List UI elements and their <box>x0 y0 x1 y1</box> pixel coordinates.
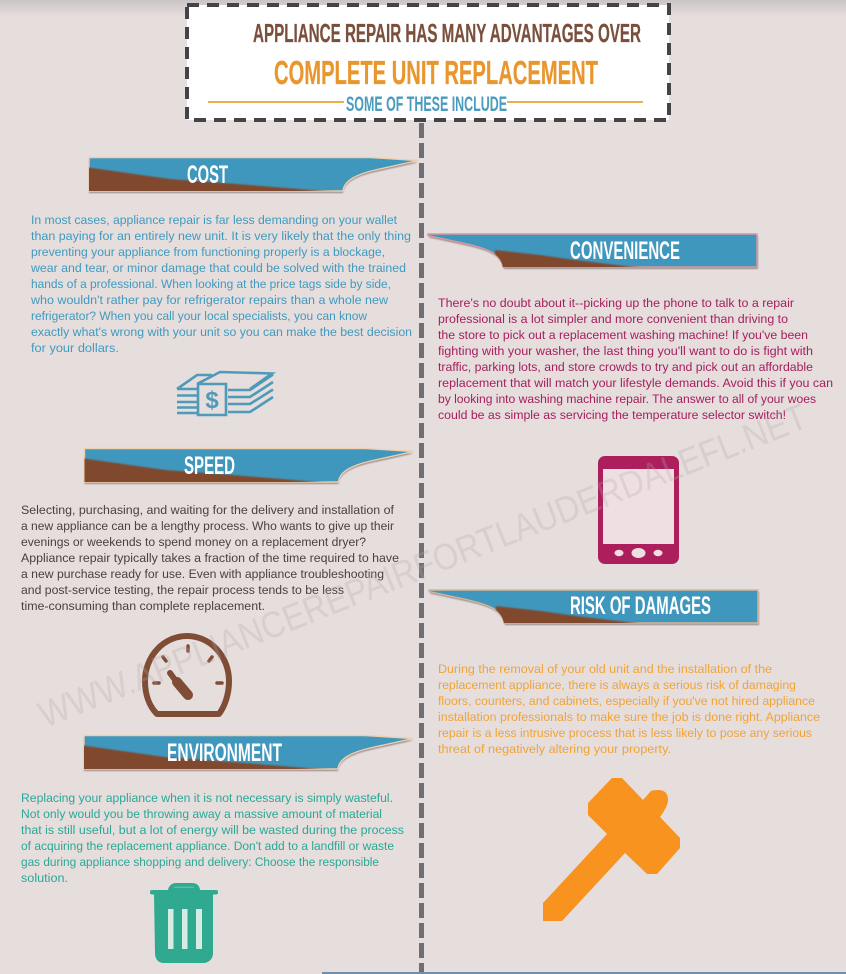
bottom edge line <box>322 972 846 974</box>
header box <box>187 5 669 120</box>
ribbon: risk of damages: RISK OF DAMAGES <box>570 592 711 620</box>
environment text <box>21 791 404 885</box>
ribbon: environment <box>80 736 413 774</box>
risk text: floors, counters, and cabinets, especially if you've not hired appliance <box>438 694 815 708</box>
cost text: than paying for an entirely new unit. It is very likely that the only thing <box>31 229 411 243</box>
cost text: In most cases, appliance repair is far less demanding on your wallet <box>31 213 398 227</box>
ribbon: convenience <box>428 234 758 269</box>
speed text <box>21 503 399 613</box>
panel: convenience <box>428 234 833 564</box>
cost text: who wouldn't rather pay for refrigerator repairs than a whole new <box>30 293 388 307</box>
environment text: that is still useful, but a lot of energy will be wasted during the process <box>21 823 404 837</box>
subtitle with rules: SOME OF THESE INCLUDE <box>346 93 507 116</box>
icon: gauge <box>145 636 229 714</box>
convenience text: fighting with your washer, the last thing you'll want to do is fight with <box>438 344 813 358</box>
ribbon: environment: ENVIRONMENT <box>167 739 282 767</box>
speed text: and post-service testing, the repair process tends to be less <box>21 583 344 597</box>
icon: trash can <box>150 883 218 963</box>
speed text: a new purchase ready for use. Even with appliance troubleshooting <box>21 567 384 581</box>
risk text: threat of negatively altering your property. <box>438 742 671 756</box>
convenience text: professional is a lot simpler and more convenient than driving to <box>438 312 788 326</box>
ribbon: risk of damages <box>429 590 759 625</box>
ribbon: speed: SPEED <box>184 452 235 480</box>
panel: risk of damages <box>429 590 820 921</box>
convenience text: traffic, parking lots, and store crowds to try and pick out an affordable <box>438 360 813 374</box>
icon: money stack: $ <box>205 387 219 414</box>
risk text: repair is a less intrusive process that is less likely to pose any serious <box>438 726 812 740</box>
cost text: refrigerator? When you call your local specialists, you can know <box>31 309 367 323</box>
risk text: installation professionals to make sure the job is done right. Appliance <box>438 710 820 724</box>
icon: phone <box>598 456 679 564</box>
speed text: time-consuming than complete replacement. <box>21 599 265 613</box>
convenience text: the store to pick out a replacement washing machine! If you've been <box>438 328 808 342</box>
environment text: gas during appliance shopping and delivery: Choose the responsible <box>21 855 379 869</box>
cost text: exactly what's wrong with your unit so you can make the best decision <box>31 325 412 339</box>
convenience text: by looking into washing machine repair. The answer to all of your woes <box>438 392 816 406</box>
ribbon: speed <box>80 448 414 487</box>
speed text: evenings or weekends to spend money on a replacement dryer? <box>21 535 366 549</box>
panel: environment <box>21 736 413 963</box>
panel: cost <box>30 158 418 415</box>
convenience text: There's no doubt about it--picking up the phone to talk to a repair <box>438 296 794 310</box>
convenience text: could be as simple as servicing the temperature selector switch! <box>438 408 786 422</box>
icon: hammer <box>543 778 680 921</box>
icon: money stack <box>177 372 273 415</box>
ribbon: convenience: CONVENIENCE <box>570 237 680 265</box>
ribbon: cost: COST <box>187 161 228 189</box>
title line 2: COMPLETE UNIT REPLACEMENT <box>274 54 598 91</box>
convenience text: replacement that will match your lifestyle demands. Avoid this if you can <box>438 376 833 390</box>
speed text: Appliance repair typically takes a fraction of the time required to have <box>21 551 399 565</box>
risk text: During the removal of your old unit and the installation of the <box>438 662 772 676</box>
cost text: wear and tear, or minor damage that could be solved with the trained <box>30 261 406 275</box>
environment text: Not only would you be throwing away a massive amount of material <box>21 807 382 821</box>
ribbon: cost <box>85 158 418 196</box>
panel: speed <box>21 448 414 714</box>
speed text: Selecting, purchasing, and waiting for the delivery and installation of <box>21 503 395 517</box>
environment text: solution. <box>21 871 68 885</box>
cost text: preventing your appliance from functioning properly is a blockage, <box>31 245 385 259</box>
risk text: replacement appliance, there is always a serious risk of damaging <box>438 678 796 692</box>
cost text: for your dollars. <box>31 341 119 355</box>
convenience text <box>438 296 833 422</box>
environment text: Replacing your appliance when it is not necessary is simply wasteful. <box>21 791 393 805</box>
speed text: a new appliance can be a lengthy process. Who wants to give up their <box>21 519 394 533</box>
environment text: of acquiring the replacement appliance. Don't add to a landfill or waste <box>21 839 394 853</box>
cost text <box>30 213 412 355</box>
center dashed divider <box>419 123 424 974</box>
cost text: hands of a professional. When looking at the price tags side by side, <box>31 277 391 291</box>
risk text <box>438 662 820 756</box>
